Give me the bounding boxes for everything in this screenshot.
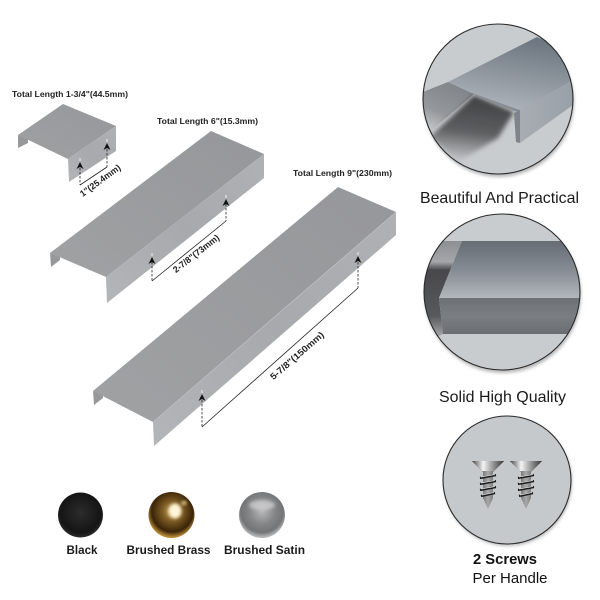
dimension: large handle hole spacing: 5-7/8"(150mm)	[268, 330, 326, 382]
heading: medium handle length: Total Length 6"(15.3mm)	[157, 116, 258, 126]
finish: brushed satin: Brushed Satin	[224, 544, 305, 557]
finish: black	[58, 492, 103, 557]
icon: right screw	[510, 461, 542, 509]
caption: solid high quality: Solid High Quality	[439, 389, 566, 406]
caption: 2 screws per handle: Per Handle	[472, 571, 548, 587]
dimension: small handle hole spacing: 1"(25.4mm)	[78, 162, 123, 199]
finish: brushed brass: Brushed Brass	[126, 544, 210, 557]
product: small handle	[18, 104, 116, 182]
dimension: medium handle hole spacing: 2-7/8"(73mm)	[171, 232, 221, 275]
dimension: medium handle hole spacing	[148, 199, 230, 281]
dimension: large handle hole spacing	[198, 256, 362, 427]
product: large handle	[93, 187, 396, 446]
product: medium handle	[50, 131, 264, 303]
heading: large handle length: Total Length 9"(230mm)	[293, 168, 392, 178]
dimension: small handle hole spacing	[76, 143, 123, 199]
finish: brushed satin	[224, 492, 305, 557]
icon: left screw	[472, 461, 504, 509]
caption: beautiful and practical: Beautiful And Practical	[420, 190, 579, 207]
circle: solid high quality detail	[420, 214, 585, 373]
circle: beautiful and practical detail	[420, 24, 580, 177]
circle: screws	[443, 416, 572, 546]
caption: 2 screws per handle	[472, 551, 548, 587]
heading: small handle length: Total Length 1-3/4"(44.5mm)	[12, 89, 128, 99]
finish: brushed brass	[126, 492, 210, 557]
caption: 2 screws per handle: 2 Screws	[473, 551, 537, 568]
finish: black: Black	[67, 544, 98, 557]
